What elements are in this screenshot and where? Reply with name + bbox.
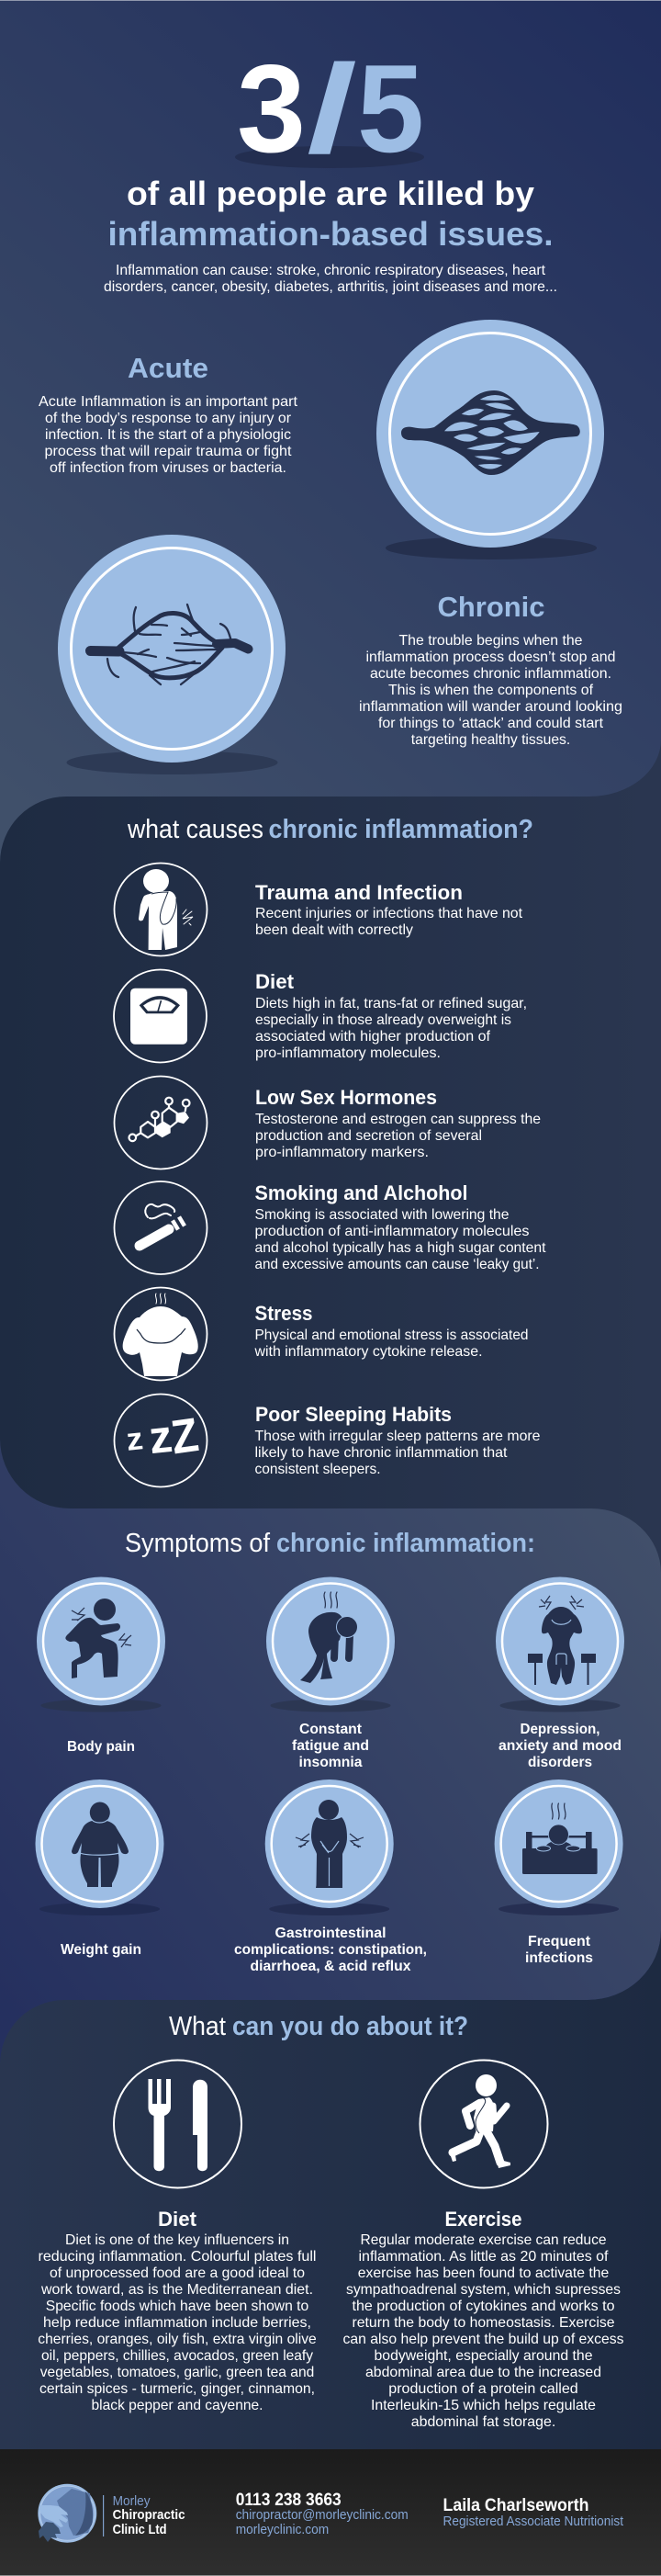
- text: diet cause: Diets high in fat, trans-fat or refined sugar,: [255, 996, 527, 1011]
- text: acute inflammation: [39, 394, 298, 476]
- text: contact details: 0113 238 3663: [236, 2491, 342, 2510]
- text: exercise solution: return the body to homeostasis. Exercise: [353, 2315, 615, 2331]
- panel: symptoms background: [0, 1439, 661, 2076]
- text: diet solution: vegetables, tomatoes, garlic, green tea and: [40, 2365, 314, 2380]
- text: poor sleeping habits: Poor Sleeping Habits: [255, 1403, 452, 1426]
- label: fatigue: Constant: [299, 1722, 362, 1737]
- icon: hormone molecule: [114, 1077, 207, 1169]
- label: frequent infections: [525, 1934, 593, 1966]
- text: diet solution: [38, 2208, 317, 2413]
- icon: acute inflamed muscle: [376, 320, 604, 559]
- label: gastrointestinal: complications: constipation,: [234, 1942, 427, 1958]
- text: exercise solution: [343, 2208, 624, 2430]
- icon: sleep zzz: z: [147, 1410, 174, 1463]
- text: exercise solution: the production of cytokines and works to: [353, 2299, 615, 2314]
- icon: clinic logo hands: [38, 2484, 96, 2543]
- text: diet solution: cherries, oranges, oily fish, extra virgin olive: [38, 2332, 317, 2347]
- text: chronic inflammation: for things to ‘attack’ and could start: [378, 716, 604, 731]
- text: nutritionist: Laila Charlseworth: [443, 2496, 589, 2515]
- heading: what causes chronic inflammation: [127, 815, 533, 844]
- text: exercise solution: abdominal fat storage.: [411, 2414, 555, 2430]
- text: contact details: chiropractor@morleyclinic.com: [236, 2507, 409, 2523]
- text: poor sleeping habits: Those with irregular sleep patterns are more: [255, 1429, 541, 1444]
- text: diet solution: of unprocessed food are a good ideal to: [50, 2265, 305, 2281]
- text: clinic name: [113, 2493, 185, 2537]
- text: diet solution: black pepper and cayenne.: [92, 2398, 263, 2413]
- label: depression: anxiety and mood: [499, 1738, 622, 1754]
- title: inflammation-based issues.: [108, 215, 553, 253]
- heading: Acute: Acute: [128, 352, 208, 384]
- heading: what can you do about it: can you do about it?: [232, 2012, 468, 2041]
- text: chronic inflammation: acute becomes chronic inflammation.: [370, 666, 611, 682]
- intro text: [104, 263, 557, 295]
- text: smoking and alchohol: and alcohol typically has a high sugar content: [255, 1240, 546, 1256]
- label: frequent infections: Frequent: [528, 1934, 590, 1949]
- text: chronic inflammation: inflammation will wander around looking: [359, 699, 622, 715]
- intro text: disorders, cancer, obesity, diabetes, arthritis, joint diseases and more...: [104, 279, 557, 295]
- text: chronic inflammation: targeting healthy tissues.: [411, 732, 570, 748]
- icon: weight gain: [35, 1779, 163, 1915]
- icon: sleep zzz: z: [125, 1421, 145, 1458]
- label: gastrointestinal: [234, 1926, 427, 1974]
- text: poor sleeping habits: likely to have chronic inflammation that: [255, 1445, 508, 1461]
- text: nutritionist: [443, 2496, 624, 2529]
- text: exercise solution: bodyweight, especially around the: [375, 2348, 593, 2364]
- text: contact details: morleyclinic.com: [236, 2522, 329, 2537]
- label: weight gain: Weight gain: [61, 1942, 141, 1958]
- text: exercise solution: inflammation. As little as 20 minutes of: [358, 2249, 609, 2265]
- title: [108, 175, 553, 253]
- text: acute inflammation: Acute Inflammation is an important part: [39, 394, 298, 410]
- text: diet solution: Diet: [158, 2208, 197, 2231]
- text: nutritionist: Registered Associate Nutritionist: [443, 2514, 624, 2529]
- icon: stressed person: [114, 1288, 207, 1380]
- text: trauma and infection: Trauma and Infection: [255, 881, 463, 904]
- text: exercise solution: exercise has been found to activate the: [358, 2265, 609, 2281]
- text: diet solution: reducing inflammation. Colourful plates full: [39, 2249, 316, 2265]
- text: stress: [254, 1302, 529, 1360]
- icon: runner: [420, 2060, 547, 2188]
- big statistic 3/5: 3: [237, 39, 306, 178]
- text: trauma and infection: Recent injuries or infections that have not: [255, 906, 523, 921]
- text: contact details: [236, 2491, 409, 2537]
- text: smoking and alchohol: production of anti-inflammatory molecules: [255, 1224, 529, 1239]
- text: poor sleeping habits: [255, 1403, 541, 1477]
- label: fatigue: fatigue and: [292, 1738, 369, 1754]
- text: exercise solution: sympathoadrenal system, which supresses: [346, 2282, 621, 2298]
- text: diet solution: oil, peppers, chillies, avocados, green leafy: [41, 2348, 313, 2364]
- label: body pain: Body pain: [67, 1739, 135, 1755]
- title: of all people are killed by: [127, 175, 534, 212]
- text: smoking and alchohol: [255, 1181, 546, 1272]
- text: diet cause: Diet: [255, 970, 295, 993]
- text: smoking and alchohol: Smoking is associated with lowering the: [255, 1207, 510, 1223]
- text: chronic inflammation: The trouble begins when the: [398, 633, 583, 649]
- intro text: Inflammation can cause: stroke, chronic respiratory diseases, heart: [116, 263, 546, 278]
- label: depression: disorders: [528, 1755, 592, 1770]
- icon: depression: [496, 1576, 624, 1712]
- icon: chronic damaged muscle: [58, 535, 286, 774]
- text: low sex hormones: [255, 1086, 541, 1160]
- icon: sleep zzz: [114, 1395, 207, 1486]
- icon: body pain: [37, 1576, 165, 1712]
- text: clinic name: Morley: [113, 2493, 151, 2509]
- text: diet solution: certain spices - turmeric, ginger, cinnamon,: [39, 2381, 315, 2397]
- text: exercise solution: Regular moderate exercise can reduce: [360, 2232, 607, 2248]
- text: acute inflammation: off infection from viruses or bacteria.: [50, 460, 286, 476]
- icon: knife and fork: [114, 2060, 241, 2188]
- big statistic 3/5: 5: [357, 39, 424, 178]
- label: depression: [499, 1722, 622, 1770]
- text: poor sleeping habits: consistent sleepers.: [255, 1462, 380, 1477]
- icon: fatigue: [266, 1576, 395, 1712]
- text: diet solution: help reduce inflammation include berries,: [43, 2315, 311, 2331]
- text: acute inflammation: infection. It is the start of a physiologic: [45, 427, 291, 443]
- text: chronic inflammation: inflammation process doesn’t stop and: [365, 650, 615, 665]
- text: exercise solution: can also help prevent the build up of excess: [343, 2332, 624, 2347]
- icon: frequent infections: [495, 1779, 623, 1915]
- text: low sex hormones: Testosterone and estrogen can suppress the: [255, 1112, 541, 1127]
- big statistic 3/5: /: [307, 39, 357, 178]
- icon: gastrointestinal: [265, 1779, 394, 1915]
- label: gastrointestinal: Gastrointestinal: [275, 1926, 386, 1941]
- text: exercise solution: production of a protein called: [388, 2381, 578, 2397]
- text: stress: with inflammatory cytokine release.: [254, 1344, 483, 1360]
- heading: symptoms of chronic inflammation: Symptoms of: [125, 1529, 271, 1558]
- heading: what causes chronic inflammation: what causes: [127, 815, 263, 844]
- heading: what can you do about it: What: [169, 2012, 226, 2041]
- text: clinic name: Clinic Ltd: [113, 2522, 167, 2537]
- panel: causes background: [0, 740, 661, 1589]
- heading: symptoms of chronic inflammation: [125, 1529, 535, 1558]
- label: frequent infections: infections: [525, 1950, 593, 1966]
- text: diet cause: associated with higher production of: [255, 1029, 491, 1045]
- text: diet solution: Specific foods which have been shown to: [46, 2299, 308, 2314]
- panel: what can you do background: [0, 1930, 661, 2449]
- label: fatigue: [292, 1722, 369, 1770]
- heading: what causes chronic inflammation: chronic inflammation?: [268, 815, 533, 844]
- text: diet cause: pro-inflammatory molecules.: [255, 1045, 441, 1061]
- text: low sex hormones: Low Sex Hormones: [255, 1086, 437, 1109]
- icon: sleep zzz: Z: [168, 1408, 202, 1465]
- text: diet solution: Diet is one of the key influencers in: [65, 2232, 289, 2248]
- text: stress: Stress: [255, 1302, 312, 1325]
- panel: footer background: [0, 2449, 661, 2576]
- text: diet cause: [255, 970, 527, 1061]
- text: low sex hormones: production and secretion of several: [255, 1128, 482, 1144]
- text: low sex hormones: pro-inflammatory markers.: [255, 1145, 429, 1160]
- text: smoking and alchohol: and excessive amounts can cause ‘leaky gut’.: [255, 1257, 540, 1272]
- text: diet cause: especially in those already overweight is: [255, 1012, 511, 1028]
- panel: intro background: [0, 0, 661, 882]
- label: gastrointestinal: diarrhoea, & acid reflux: [250, 1959, 411, 1974]
- label: fatigue: insomnia: [299, 1755, 363, 1770]
- text: chronic inflammation: This is when the components of: [388, 683, 594, 698]
- text: acute inflammation: of the body’s response to any injury or: [45, 411, 292, 426]
- text: acute inflammation: process that will repair trauma or fight: [44, 444, 292, 459]
- heading: symptoms of chronic inflammation: chronic inflammation:: [276, 1529, 535, 1558]
- icon: cigarette: [114, 1181, 207, 1274]
- label: depression: Depression,: [520, 1722, 600, 1737]
- text: stress: Physical and emotional stress is associated: [255, 1328, 529, 1343]
- text: exercise solution: abdominal area due to the increased: [365, 2365, 601, 2380]
- icon: trauma and infection: [114, 864, 207, 955]
- text: exercise solution: Exercise: [444, 2208, 521, 2231]
- big statistic 3/5: [235, 39, 424, 178]
- text: chronic inflammation: [359, 633, 622, 748]
- icon: weighing scale: [114, 970, 207, 1062]
- heading: Chronic: Chronic: [437, 591, 545, 623]
- text: smoking and alchohol: Smoking and Alchohol: [255, 1181, 468, 1204]
- divider: [103, 2495, 104, 2536]
- text: trauma and infection: been dealt with correctly: [255, 922, 413, 938]
- text: diet solution: work toward, as is the Mediterranean diet.: [40, 2282, 313, 2298]
- text: clinic name: Chiropractic: [113, 2507, 185, 2523]
- text: trauma and infection: [255, 881, 523, 938]
- text: exercise solution: Interleukin-15 which helps regulate: [371, 2398, 596, 2413]
